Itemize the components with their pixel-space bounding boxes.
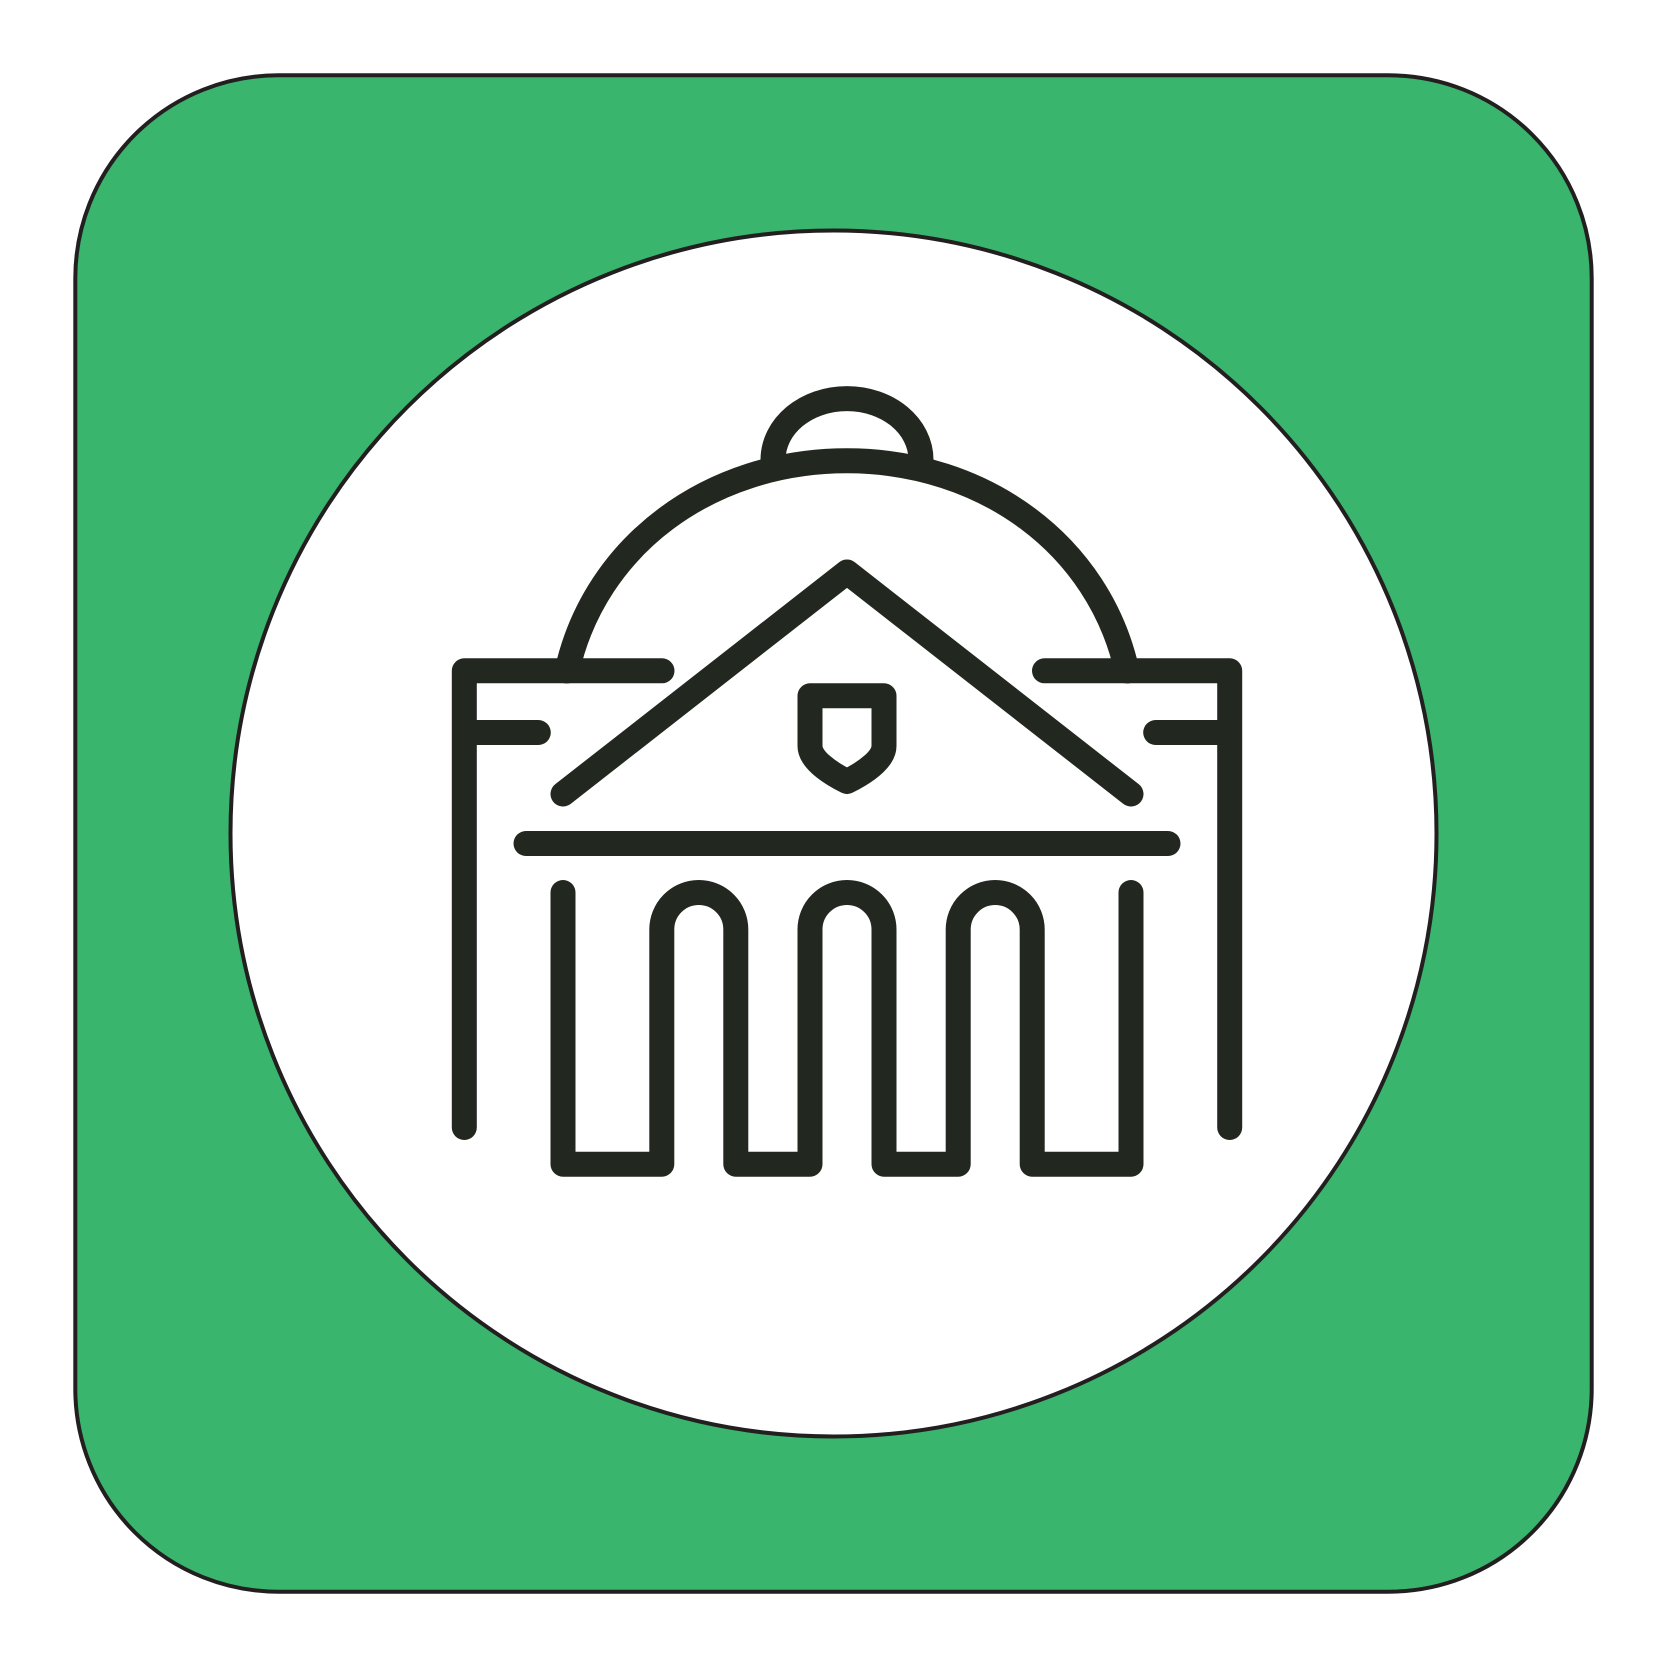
icon: left wing wall	[464, 671, 662, 1128]
panel: white circle	[230, 230, 1436, 1436]
icon: pediment roof	[563, 572, 1131, 794]
icon: university building	[464, 399, 1230, 1164]
icon: colonnade arches	[563, 892, 1131, 1164]
icon: small cupola	[773, 399, 921, 464]
icon: shield crest	[810, 696, 884, 782]
icon: entablature bar	[526, 831, 1168, 856]
icon: main dome	[567, 461, 1127, 671]
icon: right wing wall	[1044, 671, 1230, 1128]
